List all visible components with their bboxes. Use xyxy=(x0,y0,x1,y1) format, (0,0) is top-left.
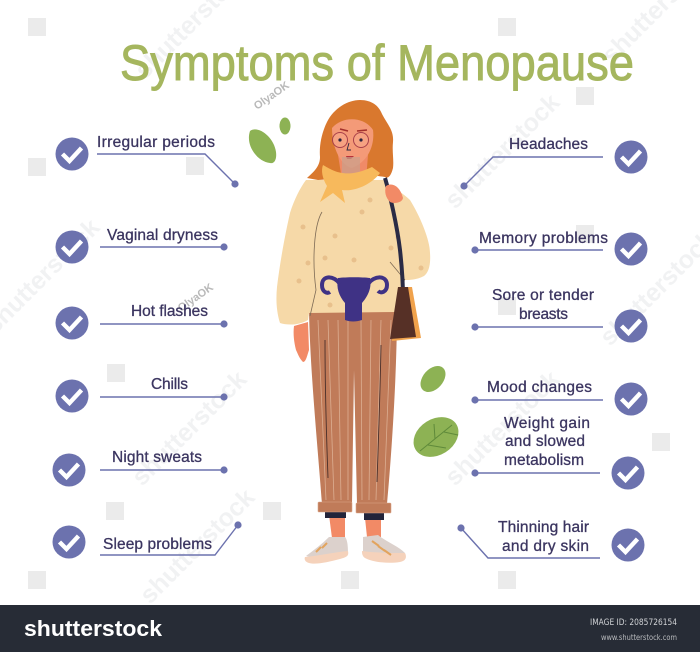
right item: Sore or tender breasts: Sore or tender xyxy=(492,287,594,304)
right item: Thinning hair and dry skin xyxy=(457,519,644,562)
bag strap xyxy=(385,178,403,298)
left item: Sleep problems: Sleep problems xyxy=(103,536,212,553)
left item: Night sweats: Night sweats xyxy=(112,449,202,466)
right item: Thinning hair and dry skin: and dry skin xyxy=(502,538,589,555)
watermark squares and text: shutterstock xyxy=(134,483,260,609)
right item: Weight gain and slowed metabolism: metabolism xyxy=(504,452,584,469)
right item: Weight gain and slowed metabolism: and slowed xyxy=(505,433,585,450)
footer bar: IMAGE ID: 2085726154 xyxy=(590,618,677,628)
right item: Mood changes: Mood changes xyxy=(487,379,592,396)
right item: Headaches xyxy=(460,136,648,190)
left item: Night sweats xyxy=(52,449,228,486)
left item: Hot flashes: Hot flashes xyxy=(131,303,208,320)
woman figure xyxy=(276,100,430,564)
watermark squares and text: OlyaOK xyxy=(252,79,292,112)
watermark squares and text: shutterstock xyxy=(126,365,252,491)
left item: Irregular periods xyxy=(56,134,239,188)
left item: Chills xyxy=(56,376,228,412)
hand on strap xyxy=(385,184,403,203)
neck and face xyxy=(338,155,368,180)
right item: Weight gain and slowed metabolism: Weight gain xyxy=(504,415,590,432)
right item: Headaches: Headaches xyxy=(509,136,588,153)
watermark squares and text: shutterstock xyxy=(439,365,565,491)
left item: Irregular periods: Irregular periods xyxy=(97,134,215,151)
sweater xyxy=(276,180,430,325)
right item: Thinning hair and dry skin: Thinning hair xyxy=(498,519,589,536)
left item: Hot flashes xyxy=(56,303,228,340)
footer bar: www.shutterstock.com xyxy=(601,633,677,642)
left item: Vaginal dryness: Vaginal dryness xyxy=(107,227,218,244)
feet and socks xyxy=(325,511,384,538)
left item: Sleep problems xyxy=(52,521,242,558)
shoes xyxy=(305,535,406,564)
right item: Memory problems xyxy=(471,230,648,266)
footer bar: shutterstock xyxy=(24,616,162,641)
uterus icon xyxy=(322,277,387,322)
icon: leaves xyxy=(249,118,466,465)
right item: Mood changes xyxy=(471,379,648,416)
left hand xyxy=(294,322,309,362)
trousers xyxy=(309,310,397,513)
watermark squares and text: OlyaOK xyxy=(176,281,216,314)
hair xyxy=(307,100,393,180)
left item: Vaginal dryness xyxy=(56,227,228,264)
bag xyxy=(392,287,421,341)
left item: Chills: Chills xyxy=(151,376,188,393)
right item: Weight gain and slowed metabolism xyxy=(471,415,644,490)
title: Symptoms of Menopause xyxy=(120,35,634,91)
scarf xyxy=(320,165,380,203)
watermark squares and text: shutterstock xyxy=(439,88,565,214)
right item: Sore or tender breasts xyxy=(471,287,648,342)
footer bar xyxy=(0,605,700,652)
right item: Memory problems: Memory problems xyxy=(479,230,608,247)
right item: Sore or tender breasts: breasts xyxy=(519,306,568,323)
